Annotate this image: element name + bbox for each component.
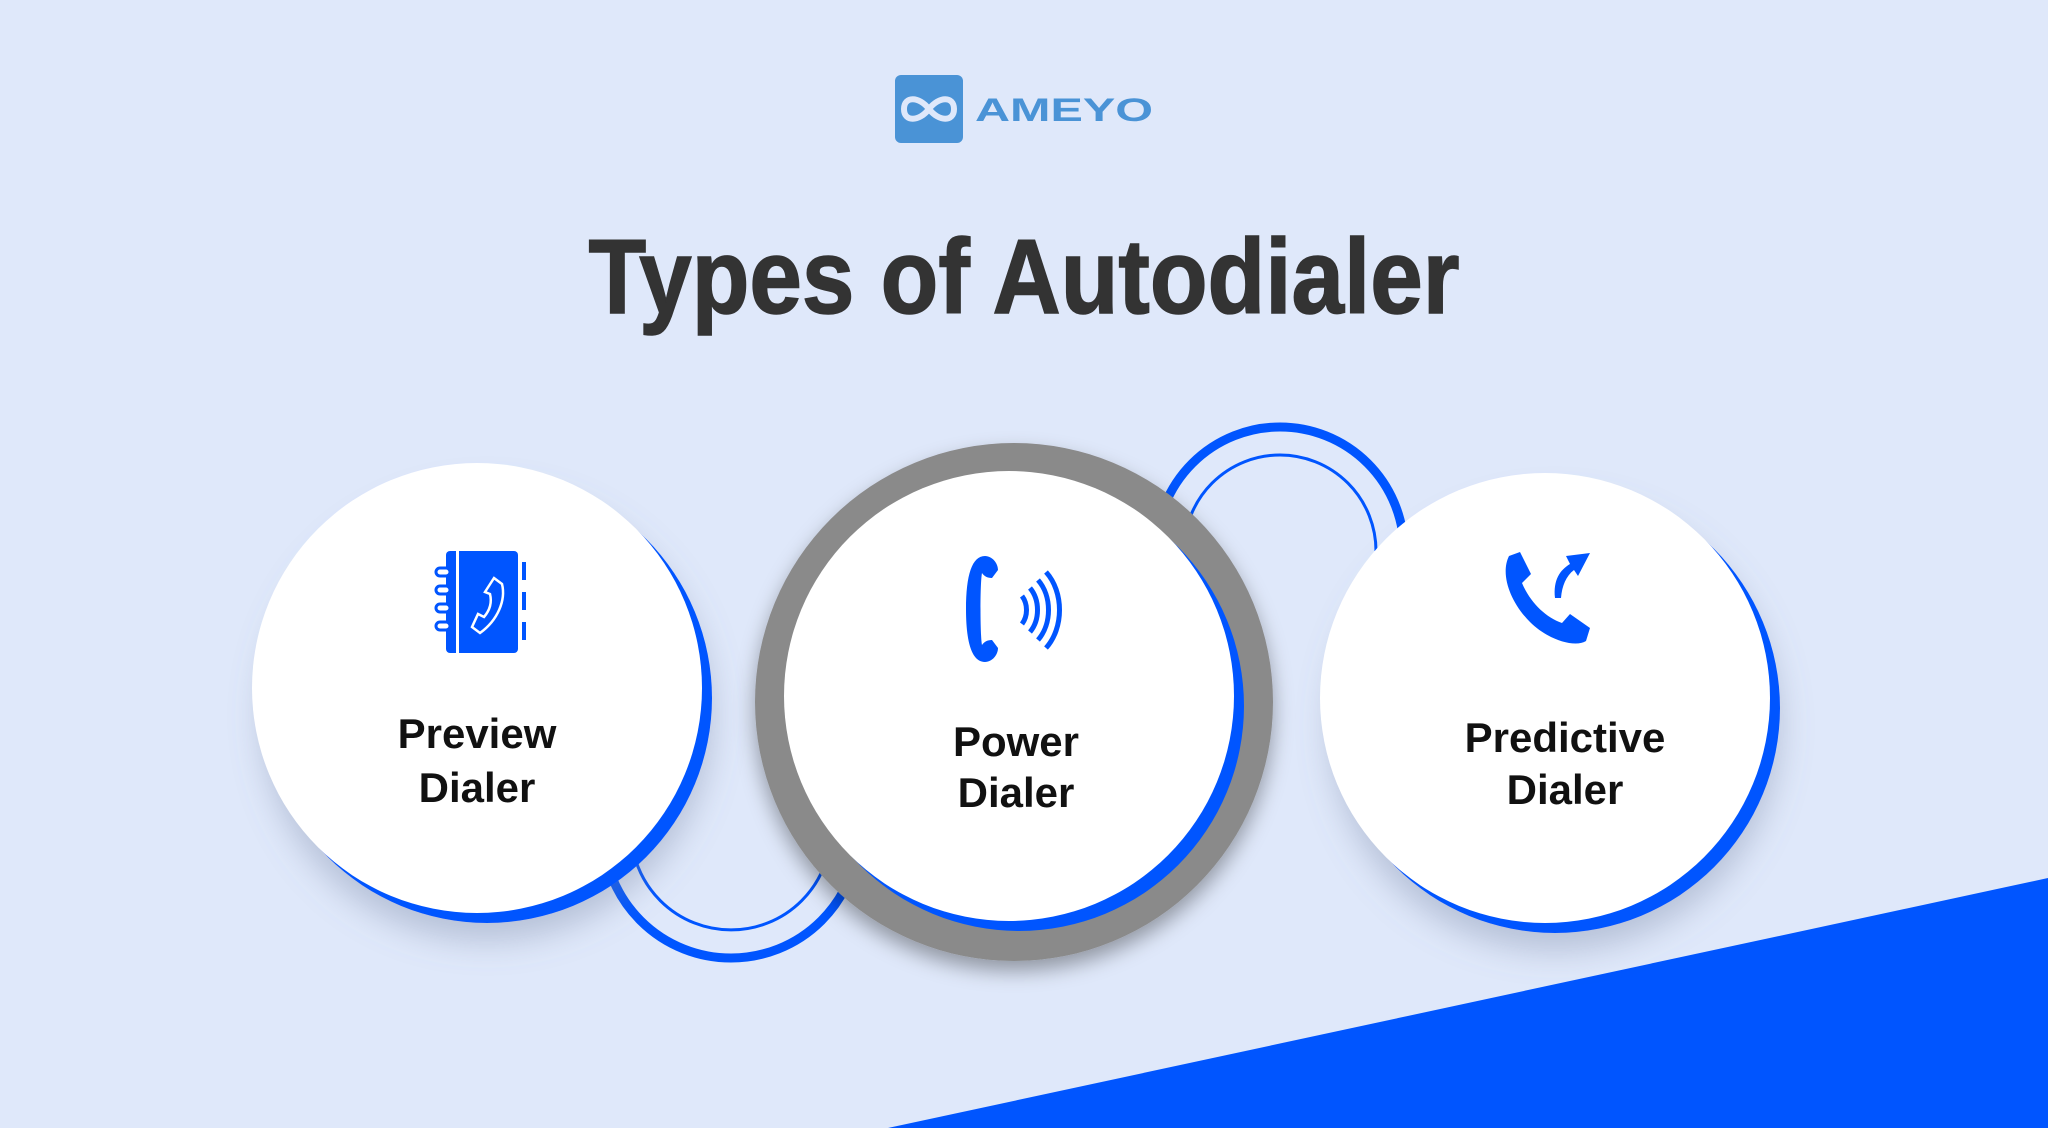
logo: AMEYO [975,92,1153,128]
icon: phone book [436,551,526,653]
blue wedge bottom right [888,878,2048,1128]
label: Preview [398,710,557,757]
label: Predictive [1465,714,1665,761]
connector arc top [1156,427,1404,551]
panel: preview dialer: Dialer [419,764,535,811]
panel: predictive dialer [1320,473,1780,933]
panel: power dialer: Dialer [958,769,1074,816]
icon: phone with outgoing arrow [1506,552,1590,644]
icon: phone with waves [966,556,1060,662]
connector arc bottom [603,830,859,958]
panel: preview dialer [252,463,712,923]
label: Power [953,718,1079,765]
panel: power dialer [755,443,1273,961]
title: Types of Autodialer [588,218,1460,336]
logo [895,75,1153,143]
panel: predictive dialer: Dialer [1507,766,1623,813]
